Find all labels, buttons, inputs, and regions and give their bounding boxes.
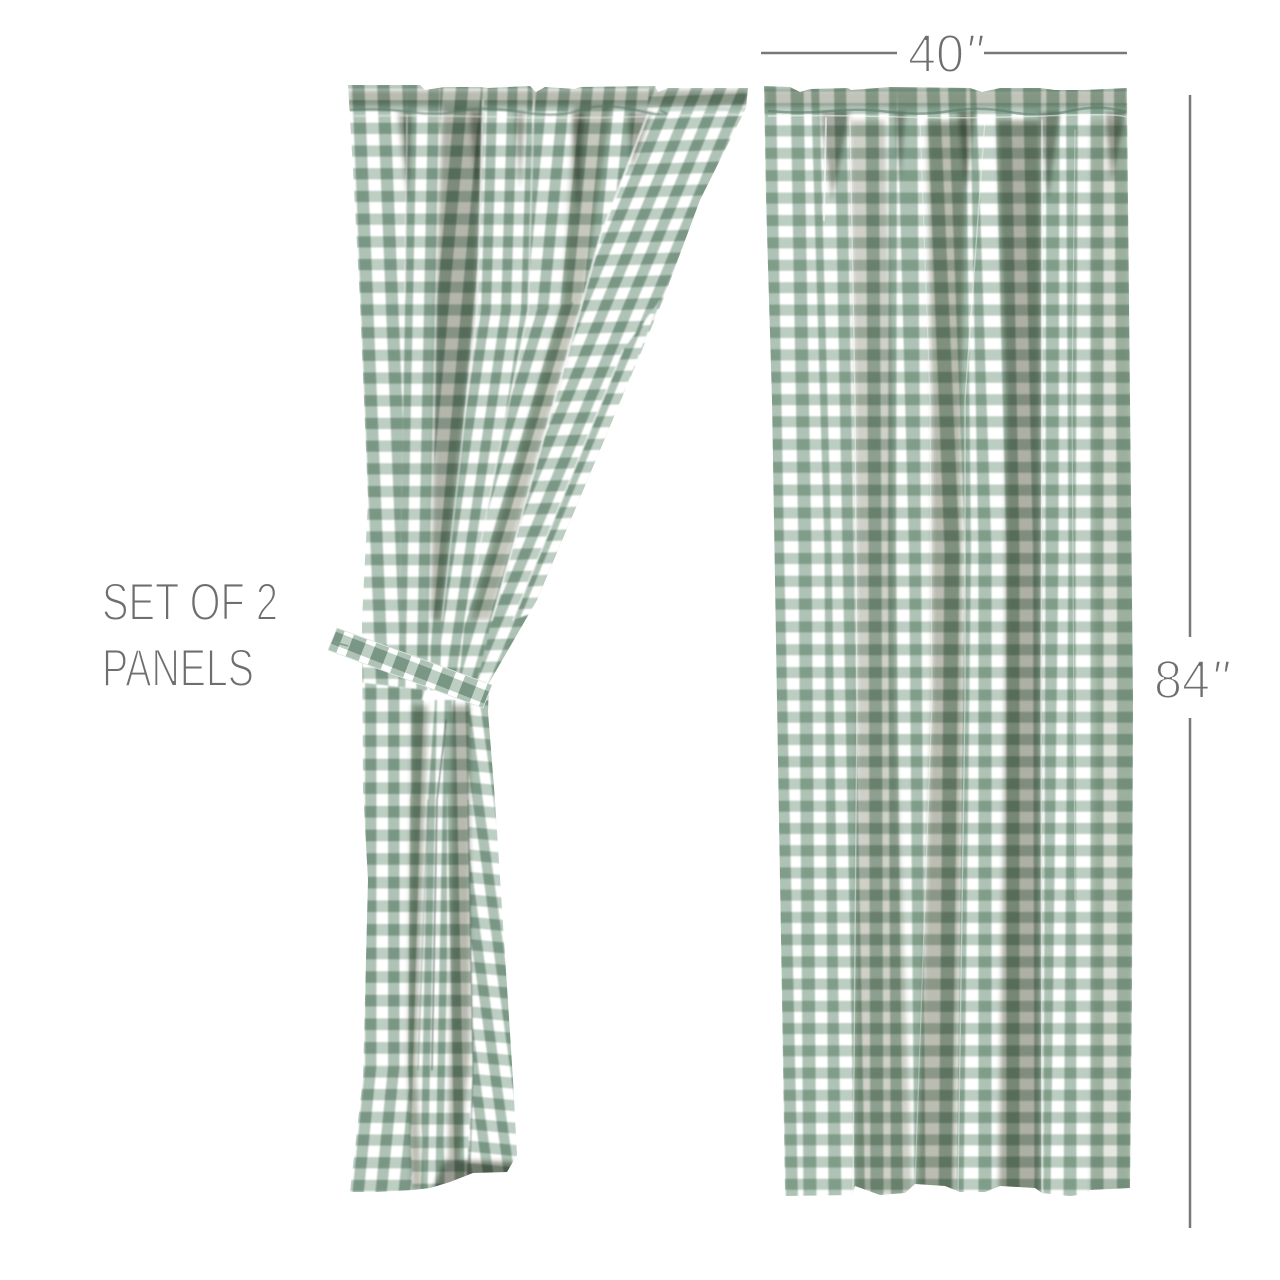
height dimension: 84 inches: 84" xyxy=(1154,650,1231,710)
pleat shadows under the left rod pocket xyxy=(348,90,748,106)
gathered pleats xyxy=(398,112,652,220)
right curtain panel xyxy=(760,80,1140,1200)
width dimension: 40 inches: 40" xyxy=(908,24,985,84)
fold highlights and creases xyxy=(405,100,648,1165)
horizontal gingham bands xyxy=(760,80,1140,1200)
fold shadows xyxy=(348,90,748,1195)
label: set of 2 panels: PANELS xyxy=(102,639,254,698)
fold highlights xyxy=(824,118,1075,1190)
left curtain rod pocket xyxy=(350,106,748,118)
fold shadows xyxy=(764,90,1135,1195)
right curtain rod pocket xyxy=(768,108,1126,118)
left curtain fabric xyxy=(340,80,760,1200)
gathered pleats xyxy=(820,112,1125,200)
label: set of 2 panels xyxy=(102,573,278,698)
tieback band xyxy=(328,628,492,708)
label: set of 2 panels: SET OF 2 xyxy=(102,573,278,632)
left curtain with tieback xyxy=(328,80,760,1200)
vertical gingham bands xyxy=(764,86,1135,1200)
